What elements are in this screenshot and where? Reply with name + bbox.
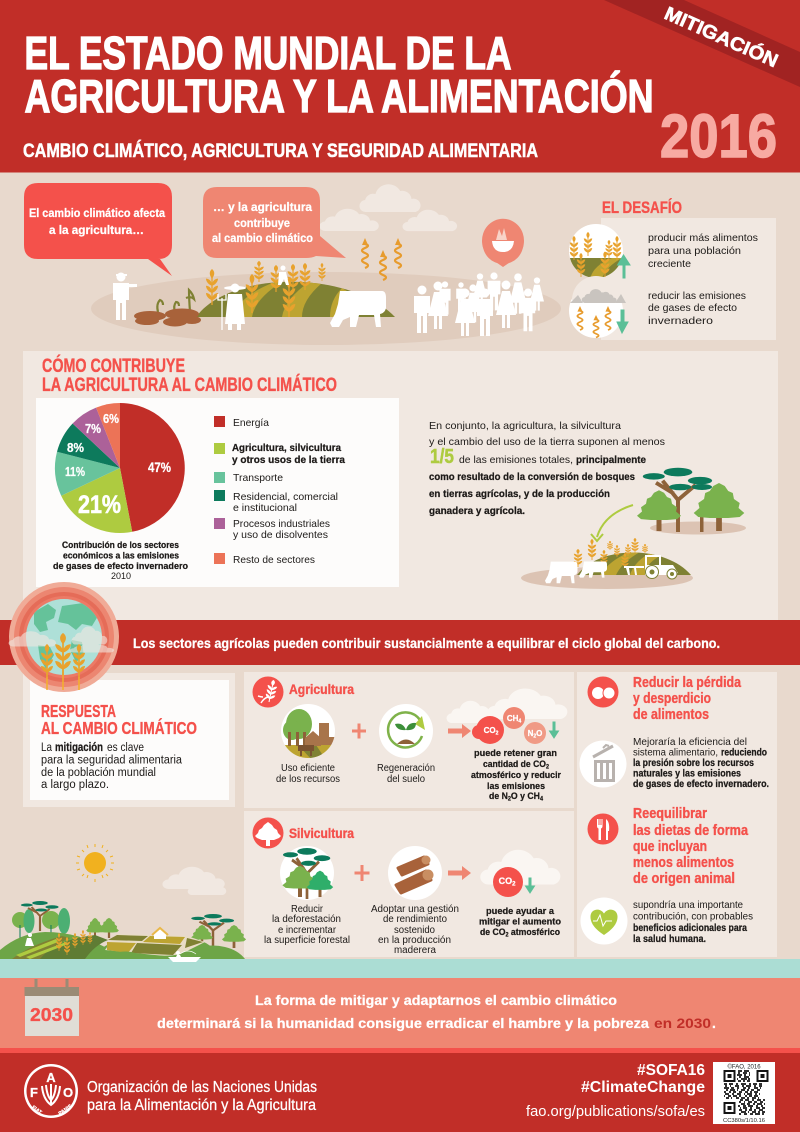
- tractor: [624, 556, 678, 579]
- sun: [76, 844, 114, 882]
- title: [24, 27, 654, 122]
- speech bubble: climate affects agriculture: El cambio climático afecta: [29, 208, 166, 220]
- panel: el desafío: [569, 198, 776, 340]
- chart caption: de gases de efecto invernadero: [53, 561, 188, 572]
- heading: [42, 355, 337, 396]
- plus: [354, 865, 370, 881]
- house: [152, 928, 168, 939]
- text: waste: reduciendo: [721, 748, 767, 758]
- labels: la superficie forestal: [264, 935, 350, 946]
- text: health: supondría una importante: [633, 900, 744, 911]
- result text: puede ayudar a: [486, 906, 555, 917]
- result text: 2: [508, 796, 512, 802]
- text: less emissions: invernadero: [648, 315, 713, 327]
- text: a largo plazo.: [41, 779, 109, 791]
- crops wheat: [56, 930, 92, 955]
- ribbon: mitigación: [604, 0, 800, 87]
- heading: rebalance diets: las dietas de forma: [633, 823, 749, 839]
- logo: FAO: FIAT: [30, 1105, 43, 1116]
- panel: respuesta: [23, 673, 235, 807]
- speech bubble: agriculture contributes: contribuye: [234, 218, 290, 230]
- icon: soil regeneration: [379, 704, 433, 758]
- clouds: [162, 867, 226, 895]
- explanatory text: [429, 420, 665, 517]
- hashtags and link: #SOFA16: [637, 1062, 705, 1079]
- result text: O y CH: [511, 791, 540, 802]
- arrow: [448, 866, 471, 880]
- result text: las emisiones: [487, 781, 545, 792]
- heading: LA AGRICULTURA AL CAMBIO CLIMÁTICO: [42, 374, 337, 396]
- gases illustration: CO: [484, 726, 496, 735]
- legend: Residencial, comercial: [233, 491, 338, 503]
- legend: e institucional: [233, 502, 297, 514]
- heading: rebalance diets: de origen animal: [633, 871, 735, 887]
- panel: how agriculture contributes: [23, 351, 778, 621]
- gases illustration: 2: [512, 882, 516, 888]
- message: .: [712, 1015, 716, 1031]
- result text: 4: [540, 796, 544, 802]
- title: EL ESTADO MUNDIAL DE LA: [24, 27, 512, 79]
- speech bubble: agriculture contributes: … y la agricultura: [213, 202, 313, 214]
- labels: la deforestación: [272, 914, 341, 925]
- heading: EL DESAFÍO: [602, 198, 682, 217]
- result text: atmosférico: [509, 927, 560, 938]
- labels: Adoptar una gestión: [371, 904, 459, 915]
- text: de la población mundial: [41, 767, 156, 779]
- result text: cantidad de CO: [483, 759, 553, 770]
- pie chart: 8%: [67, 440, 84, 455]
- labels: e incrementar: [278, 925, 337, 936]
- labels: Reducir: [291, 904, 324, 915]
- legend: Transporte: [233, 472, 283, 484]
- pie chart: 21%: [78, 491, 121, 519]
- plus: [352, 724, 366, 738]
- gases illustration: 2: [496, 730, 499, 736]
- heading: CÓMO CONTRIBUYE: [42, 355, 185, 377]
- legend: [214, 416, 345, 566]
- text: La: [41, 742, 53, 754]
- icon: less emissions: [569, 276, 628, 338]
- labels: de rendimiento: [383, 914, 447, 925]
- gases illustration: 2: [533, 734, 536, 740]
- result text: de N: [489, 791, 510, 802]
- panel: agricultura: [244, 672, 574, 808]
- heading: Agricultura: [289, 682, 354, 697]
- ground ellipse: [91, 272, 561, 345]
- organization name: Organización de las Naciones Unidas: [87, 1079, 317, 1096]
- hashtags and link: #ClimateChange: [581, 1079, 705, 1096]
- heading: reduce waste: Reducir la pérdida: [633, 675, 742, 691]
- gases illustration: [480, 850, 560, 897]
- subtitle: CAMBIO CLIMÁTICO, AGRICULTURA Y SEGURIDAD ALIMENTARIA: [23, 139, 538, 162]
- illustration: farmland: [521, 538, 693, 589]
- speech bubble: agriculture contributes: al cambio climático: [212, 233, 313, 245]
- gases illustration: 4: [518, 718, 521, 724]
- text: waste: naturales y las emisiones: [633, 768, 741, 780]
- heading: reduce waste: y desperdicio: [633, 691, 711, 707]
- labels: del suelo: [387, 774, 425, 785]
- labels: en la producción: [378, 935, 451, 946]
- text: less emissions: reducir las emisiones: [648, 290, 746, 302]
- banner: carbon cycle: Los sectores agrícolas pueden contribuir sustancialmente a equilibrar el ciclo global del carbono.: [133, 635, 720, 651]
- icon: more food: [569, 224, 630, 280]
- labels: Uso eficiente: [281, 763, 335, 774]
- explanatory text: En conjunto, la agricultura, la silvicultura: [429, 420, 621, 432]
- farmer: [25, 933, 34, 946]
- icon: calendar: 2030: [30, 1004, 73, 1025]
- chart caption: económicos a las emisiones: [63, 550, 179, 562]
- explanatory text: de las emisiones totales,: [459, 454, 573, 466]
- explanatory text: principalmente: [576, 454, 646, 466]
- result text: atmosférico y reducir: [471, 770, 561, 781]
- QR code: [713, 1062, 775, 1124]
- result text: puede retener gran: [474, 748, 557, 759]
- text: mitigación: [55, 742, 103, 754]
- gases illustration: N: [528, 729, 533, 738]
- speech bubble: climate affects agriculture: a la agricultura…: [49, 225, 144, 237]
- farmer looking at crops: [113, 272, 137, 320]
- trees: [12, 901, 246, 948]
- icon: forest: [280, 846, 334, 900]
- pie chart: 11%: [65, 464, 85, 479]
- icon: wheat and runner: [252, 676, 284, 708]
- panel: silvicultura: [244, 811, 574, 957]
- withered plants and soil: [134, 290, 201, 326]
- message: determinará si la humanidad consigue erradicar el hambre y la pobreza: [157, 1015, 649, 1031]
- labels: maderera: [394, 945, 436, 956]
- text: waste: la presión sobre los recursos: [633, 758, 754, 769]
- logo: FAO: [24, 1064, 78, 1118]
- text: waste: sistema alimentario,: [633, 748, 718, 758]
- cultivated hill: [196, 280, 395, 317]
- icon: calendar: [24, 979, 79, 1036]
- pie chart: [55, 403, 185, 533]
- text: more food: producir más alimentos: [648, 232, 758, 244]
- band: call to action: [0, 978, 800, 1048]
- scene: climate and agriculture illustration: [91, 184, 561, 345]
- gases illustration: O: [536, 729, 542, 738]
- icon: tree: [252, 818, 284, 848]
- labels: Regeneración: [377, 763, 435, 774]
- text: more food: para una población: [648, 245, 741, 257]
- chart card: [36, 398, 399, 587]
- icon: fork and knife: [588, 814, 618, 844]
- explanatory text: ganadera y agrícola.: [429, 505, 525, 517]
- heading: reduce waste: de alimentos: [633, 707, 709, 723]
- heading: Silvicultura: [289, 826, 354, 841]
- QR code: CC380s/1/10.16: [723, 1118, 765, 1124]
- result text: de CO: [480, 927, 508, 938]
- panel: food waste and diets: [577, 672, 777, 957]
- chart caption: [53, 540, 188, 582]
- ribbon: mitigación: MITIGACIÓN: [661, 2, 781, 72]
- message: [157, 992, 716, 1031]
- heading: rebalance diets: menos alimentos: [633, 855, 734, 871]
- heading: reduce waste: [633, 675, 742, 723]
- heading: rebalance diets: que incluyan: [633, 839, 707, 855]
- text: health: beneficios adicionales para: [633, 923, 747, 934]
- result text: 2: [505, 932, 509, 938]
- legend: Energía: [233, 417, 269, 429]
- result text: 2: [546, 764, 550, 770]
- icon: heart: [580, 898, 628, 944]
- crowd of people: [414, 272, 544, 336]
- QR code: ©FAO, 2016: [727, 1064, 761, 1070]
- small worker: [278, 266, 289, 285]
- result text: [479, 906, 561, 938]
- text: waste: Mejoraría la eficiencia del: [633, 737, 747, 748]
- labels: [264, 904, 459, 956]
- icon: trash can: [580, 740, 626, 788]
- hashtags and link: fao.org/publications/sofa/es: [526, 1103, 705, 1120]
- labels: sostenido: [394, 925, 435, 936]
- labels: [276, 763, 435, 785]
- text: health: [633, 900, 753, 945]
- logo: FAO: O: [63, 1085, 73, 1100]
- woman with pitchfork: [218, 284, 246, 330]
- icon: globe with wheat: [9, 582, 119, 692]
- text: [41, 742, 183, 791]
- organization name: para la Alimentación y la Agricultura: [87, 1097, 316, 1114]
- organization name: [87, 1079, 317, 1114]
- text: more food: [648, 232, 758, 270]
- chart caption: Contribución de los sectores: [62, 540, 179, 551]
- footer: [0, 1048, 800, 1132]
- legend: Procesos industriales: [233, 518, 330, 530]
- logo: FAO: F: [30, 1085, 38, 1100]
- hashtags and link: [526, 1062, 705, 1120]
- clouds: [319, 184, 457, 231]
- heading: RESPUESTA: [41, 701, 116, 721]
- text: health: contribución, con probables: [633, 912, 753, 922]
- arrow: forest to farmland: [591, 505, 633, 541]
- text: waste: de gases de efecto invernadero.: [633, 779, 769, 790]
- icon: efficient resources: [281, 704, 335, 761]
- gases illustration: [447, 688, 567, 744]
- icon: food: [588, 676, 618, 708]
- text: para la seguridad alimentaria: [41, 754, 183, 766]
- speech bubble: climate affects agriculture: [24, 183, 172, 276]
- text: less emissions: [648, 290, 746, 327]
- text: less emissions: de gases de efecto: [648, 302, 737, 314]
- legend: y otros usos de la tierra: [232, 454, 345, 466]
- explanatory text: en tierras agrícolas, y de la producción: [429, 488, 610, 500]
- logo: FAO: PANIS: [58, 1103, 74, 1117]
- text: es clave: [107, 742, 144, 754]
- explanatory text: como resultado de la conversión de bosques: [429, 471, 635, 483]
- greenhouse gas squiggles: [362, 238, 401, 280]
- pie chart: 6%: [103, 411, 119, 426]
- logo: FAO: A: [46, 1070, 56, 1085]
- message: en 2030: [654, 1015, 711, 1031]
- speech bubble: agriculture contributes: [203, 187, 346, 258]
- cow: [330, 291, 386, 327]
- illustration: landscape: [0, 844, 246, 959]
- icon: logs: [388, 846, 442, 900]
- wheat on hill: [206, 261, 326, 317]
- explanatory text: 1/5: [430, 446, 454, 468]
- arrow: [448, 724, 471, 738]
- fields: [12, 934, 205, 959]
- chart caption: 2010: [111, 571, 131, 582]
- gases illustration: CH: [507, 714, 518, 723]
- heading: rebalance diets: Reequilibrar: [633, 806, 707, 822]
- text: health: la salud humana.: [633, 934, 706, 945]
- header band: [0, 0, 800, 172]
- legend: Resto de sectores: [233, 554, 315, 566]
- banner: carbon cycle: [0, 620, 800, 665]
- year: 2016: [660, 102, 777, 170]
- pie chart: 7%: [85, 421, 101, 436]
- message: La forma de mitigar y adaptarnos el cambio climático: [255, 992, 617, 1008]
- labels: de los recursos: [276, 774, 340, 785]
- food security pin: [482, 219, 524, 267]
- heading: rebalance diets: [633, 806, 749, 887]
- illustration: forest: [637, 468, 746, 534]
- icon: fishing boat: [168, 951, 201, 962]
- legend: y uso de disolventes: [233, 529, 328, 541]
- water band: [0, 959, 800, 978]
- heading: AL CAMBIO CLIMÁTICO: [41, 717, 197, 738]
- hills: [0, 932, 120, 959]
- text: more food: creciente: [648, 258, 691, 270]
- gases illustration: CO: [499, 876, 512, 886]
- result text: [471, 748, 561, 802]
- explanatory text: y el cambio del uso de la tierra suponen al menos: [429, 436, 665, 448]
- legend: Agricultura, silvicultura: [232, 442, 341, 454]
- heading: [41, 701, 197, 738]
- pie chart: 47%: [148, 460, 171, 475]
- result text: mitigar el aumento: [479, 916, 561, 928]
- text: waste: [633, 737, 769, 790]
- front hill: [100, 946, 245, 959]
